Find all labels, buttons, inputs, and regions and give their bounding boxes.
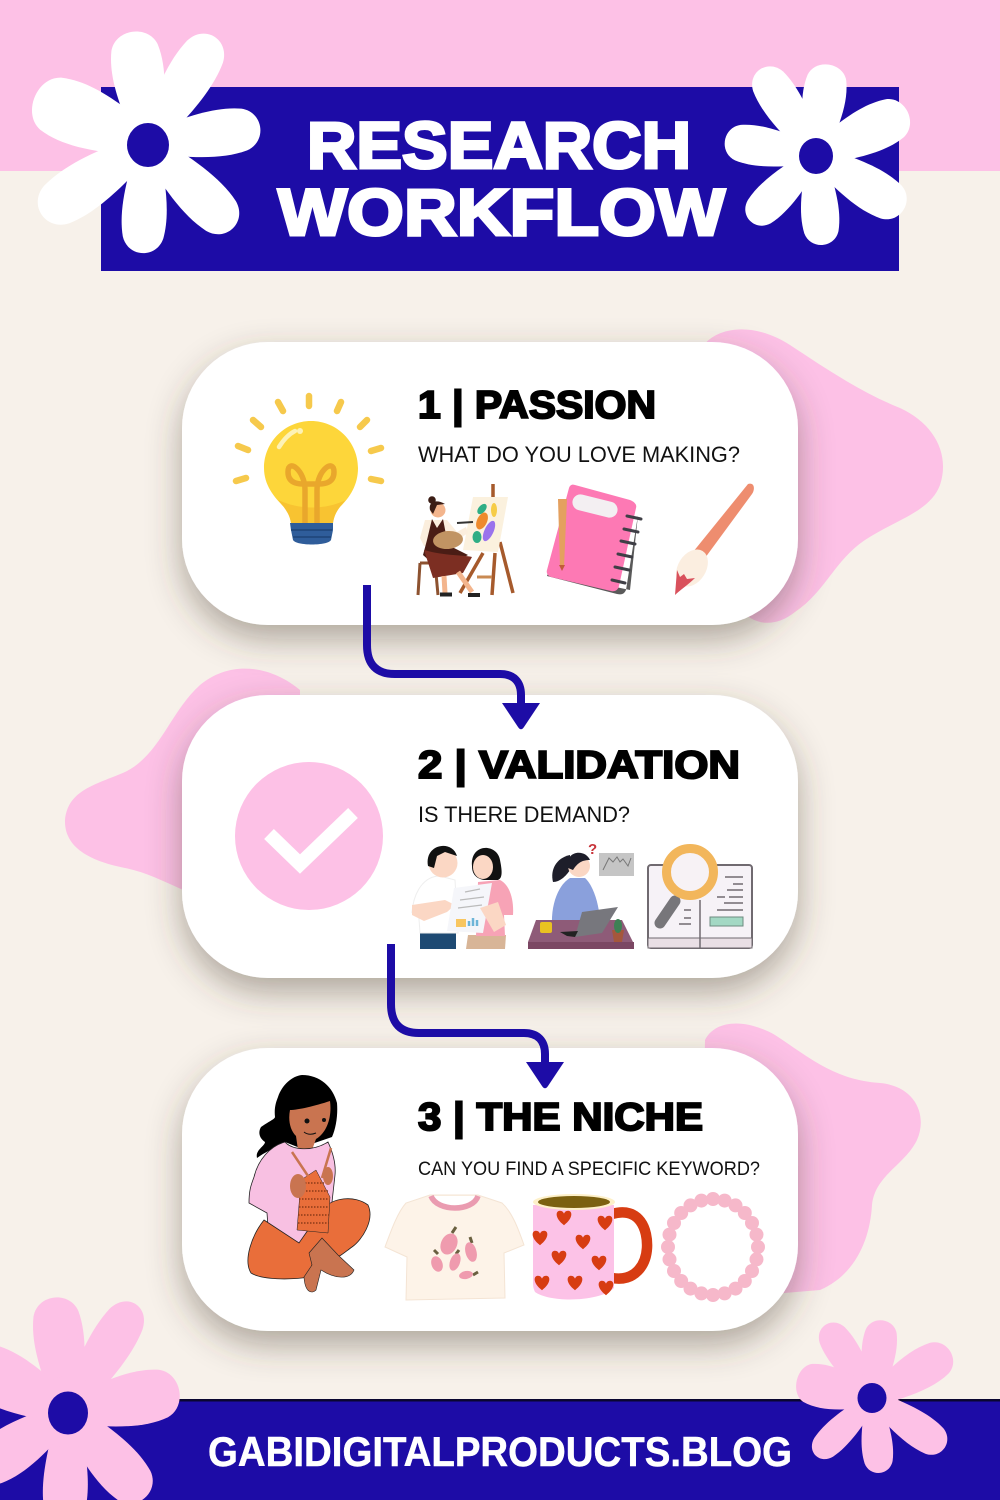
footer url: GABIDIGITALPRODUCTS.BLOG [208,1428,792,1475]
title: RESEARCH [307,108,691,182]
footer bar [0,1399,1000,1500]
panel: the niche [182,1048,798,1331]
icon: woman with laptop and question: ? [588,841,597,858]
icon: paintbrush [670,484,754,595]
panel: validation [182,695,798,978]
icon: strawberry t-shirt [385,1195,524,1300]
icon: two people with report [412,846,513,949]
icon: pink flower bottom left [0,1293,184,1500]
header pink band [0,0,1000,171]
card background [182,342,798,625]
subheading: CAN YOU FIND A SPECIFIC KEYWORD? [418,1158,760,1180]
title [278,108,726,249]
icon: light bulb [236,396,381,544]
heading: 2 | VALIDATION [418,744,740,787]
icon: pink notebook [547,485,641,594]
icon: white flower left [23,24,263,254]
subheading: WHAT DO YOU LOVE MAKING? [418,442,740,467]
icon: book with magnifier [648,848,752,948]
icon: woman knitting [248,1075,370,1292]
icon: woman with laptop and question [528,841,634,949]
blob: top right [700,329,943,623]
arrow: passion to validation [367,585,540,729]
subheading: IS THERE DEMAND? [418,802,630,827]
heading: 1 | PASSION [418,384,656,427]
panel: passion [182,342,798,625]
icon: pink flower bottom right [792,1316,961,1474]
icon: check circle [235,762,383,910]
blob: bottom right [700,1024,921,1300]
blob: middle left [65,669,300,895]
icon: white flower right [722,58,918,246]
title: WORKFLOW [278,175,726,249]
heading: 3 | THE NICHE [418,1096,703,1139]
icon: heart mug [533,1194,647,1299]
arrow: validation to niche [391,944,564,1088]
card background [182,695,798,978]
card background [182,1048,798,1331]
title banner [101,87,899,271]
icon: painter at easel [418,484,513,595]
icon: pink bead bracelet [661,1192,765,1302]
